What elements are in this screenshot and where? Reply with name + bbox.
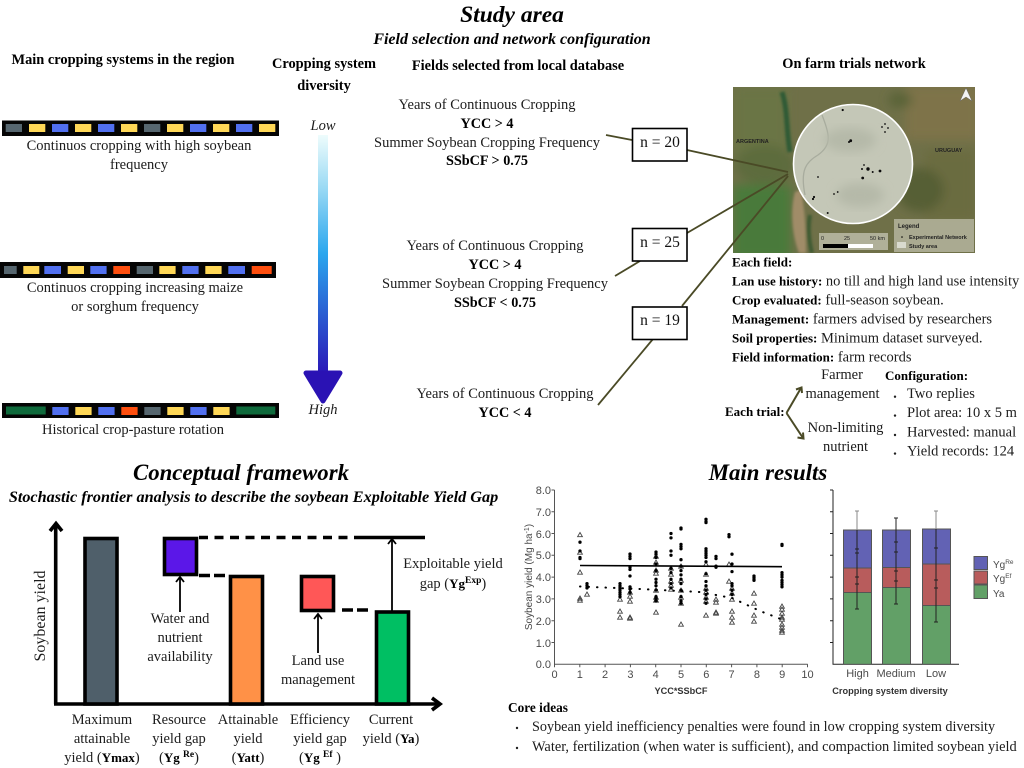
caption: high soybean: frequency bbox=[110, 157, 169, 173]
text: non-limiting nutrient: Non-limiting bbox=[808, 420, 883, 436]
map label: argentina: ARGENTINA bbox=[736, 139, 769, 145]
icon: north arrow bbox=[960, 88, 972, 101]
arrow: water and nutrient bbox=[176, 577, 184, 612]
y tick labels: 5.0 bbox=[536, 550, 551, 562]
x tick labels: 5 bbox=[678, 669, 684, 681]
map scale bar: 0 bbox=[821, 236, 824, 242]
text: each field details: Field information: bbox=[732, 350, 834, 364]
scatter: open triangles bbox=[578, 532, 784, 634]
bar: high bbox=[844, 530, 872, 664]
text: land use management: Land use bbox=[292, 653, 344, 669]
x tick labels: 0 bbox=[551, 669, 558, 681]
text: land use management: management bbox=[281, 672, 355, 688]
label: efficiency yield gap: Ef bbox=[323, 750, 333, 760]
label: efficiency yield gap: Yg bbox=[304, 750, 323, 765]
map legend: Legend bbox=[898, 224, 920, 230]
bar: attainable yield bbox=[230, 576, 262, 704]
text: core ideas: Water, fertilization (when water is sufficient), and compaction limited soybean yield bbox=[532, 739, 1018, 755]
label: maximum attainable yield: attainable bbox=[74, 731, 130, 747]
y axis title: Soybean yield (Mg ha bbox=[524, 533, 535, 630]
heading: fields selected: Fields selected from local database bbox=[412, 58, 625, 74]
y tick labels: 3.0 bbox=[536, 594, 551, 606]
text: core ideas: Soybean yield inefficiency penalties were found in low cropping system diversity bbox=[532, 719, 996, 735]
text: each field details: Management: bbox=[732, 312, 809, 326]
label: efficiency yield gap: yield gap bbox=[293, 731, 347, 747]
y tick labels: 1.0 bbox=[536, 638, 551, 650]
map legend: Study area bbox=[909, 244, 938, 250]
subtitle: stochastic frontier: Stochastic frontier analysis to describe the soybean Exploitable Yield Gap bbox=[9, 488, 498, 506]
label: current yield: Current bbox=[369, 712, 413, 728]
chart: scatter soybean yield vs YCC*SSbCF bbox=[524, 485, 814, 696]
y tick labels: 0.0 bbox=[536, 659, 551, 671]
x tick labels: 8 bbox=[754, 669, 760, 681]
map: experimental network points bbox=[812, 109, 889, 214]
label: maximum attainable yield: Ymax) bbox=[102, 750, 140, 766]
panel: cropping system two bbox=[0, 262, 276, 315]
label: attainable yield: ( bbox=[232, 750, 237, 766]
text: field criteria group one: YCC > 4 bbox=[460, 116, 514, 132]
arrows: trial branches bbox=[786, 388, 804, 438]
y tick labels: 7.0 bbox=[536, 507, 551, 519]
label: each trial: Each trial: bbox=[725, 404, 785, 419]
label: resource yield gap: Resource bbox=[152, 712, 206, 728]
y axis title: ) bbox=[524, 524, 535, 527]
dashed reference lines bbox=[199, 538, 425, 610]
text: exploitable yield gap: Exploitable yield bbox=[403, 556, 503, 572]
category labels: High bbox=[846, 668, 869, 680]
x tick labels bbox=[551, 669, 814, 681]
bar: resource yield gap bbox=[164, 538, 196, 574]
bar: maximum attainable yield bbox=[85, 538, 117, 704]
x tick labels: 9 bbox=[779, 669, 785, 681]
y tick labels bbox=[536, 485, 551, 671]
text: each field details: Crop evaluated: bbox=[732, 292, 822, 308]
title: study area: Study area bbox=[460, 2, 564, 28]
y tick labels: 4.0 bbox=[536, 572, 551, 584]
text: configuration bbox=[885, 368, 1018, 460]
category labels: Medium bbox=[876, 668, 916, 680]
arrow: diversity gradient bbox=[306, 135, 340, 401]
crop strip: increasing maize bbox=[0, 262, 276, 278]
chart: conceptual yield gap diagram bbox=[32, 524, 503, 766]
heading: main results: Main results bbox=[708, 460, 827, 485]
text: each field details: farmers advised by researchers bbox=[809, 312, 992, 328]
box: n = 20 bbox=[632, 128, 687, 161]
map scale bar bbox=[819, 233, 888, 250]
panel: each trial bbox=[725, 367, 1018, 460]
map: on farm trials network bbox=[733, 56, 980, 260]
text: exploitable yield gap: gap ( bbox=[420, 576, 449, 592]
x tick labels: 7 bbox=[729, 669, 735, 681]
connector lines bbox=[598, 135, 788, 405]
crop strip: pasture rotation bbox=[2, 403, 279, 418]
caption: high soybean: Continuos cropping with high soybean bbox=[27, 138, 252, 154]
scatter: filled circles bbox=[580, 519, 782, 603]
label: attainable yield: Yatt) bbox=[236, 750, 264, 766]
heading: cropping system diversity: diversity bbox=[297, 78, 352, 94]
text: field criteria group two: SSbCF < 0.75 bbox=[454, 295, 536, 311]
text: water and nutrient availability: nutrient bbox=[157, 630, 203, 646]
subtitle: field selection: Field selection and network configuration bbox=[372, 31, 651, 48]
label: resource yield gap: yield gap bbox=[152, 731, 206, 747]
x tick labels: 4 bbox=[653, 669, 659, 681]
label: soybean yield axis: Soybean yield bbox=[32, 570, 49, 662]
label: current yield: Ya) bbox=[400, 731, 419, 747]
x tick labels: 1 bbox=[577, 669, 583, 681]
map: study area circle bbox=[794, 104, 912, 224]
text: field criteria group two: Summer Soybean Cropping Frequency bbox=[382, 276, 609, 292]
x axis title: YCC*SSbCF bbox=[654, 686, 708, 696]
caption: pasture rotation: Historical crop-pasture rotation bbox=[42, 422, 225, 438]
label: resource yield gap: ) bbox=[194, 750, 199, 766]
text: core ideas: Core ideas bbox=[508, 700, 568, 715]
text: each field details: Minimum dataset surveyed. bbox=[817, 330, 982, 346]
text: configuration: Harvested: manual bbox=[907, 424, 1016, 440]
heading: on farm trials network: On farm trials network bbox=[782, 56, 926, 72]
category labels: Low bbox=[926, 668, 946, 680]
label: efficiency yield gap: ( bbox=[299, 750, 304, 766]
map scale bar: 50 km bbox=[870, 236, 885, 242]
text: each field details: farm records bbox=[834, 350, 912, 366]
legend: Ya bbox=[993, 589, 1005, 600]
error bars bbox=[855, 511, 938, 622]
chart: stacked bars by cropping system diversity bbox=[830, 490, 1014, 696]
legend bbox=[974, 556, 1014, 600]
text: each field details: full-season soybean. bbox=[822, 292, 944, 308]
text: non-limiting nutrient: nutrient bbox=[823, 439, 868, 455]
label: maximum attainable yield: Maximum bbox=[72, 712, 133, 728]
x tick labels: 2 bbox=[602, 669, 608, 681]
text: field criteria group two: YCC > 4 bbox=[468, 257, 522, 273]
label: current yield: yield ( bbox=[363, 731, 400, 747]
text: water and nutrient availability: availability bbox=[147, 649, 213, 665]
label: resource yield gap: Re bbox=[183, 750, 194, 760]
axes bbox=[50, 524, 440, 710]
label: attainable yield: Attainable bbox=[218, 712, 278, 728]
text: exploitable yield gap: Yg bbox=[449, 576, 466, 591]
arrow: exploitable gap bbox=[388, 539, 396, 611]
text: field criteria group one: Summer Soybean Cropping Frequency bbox=[374, 135, 601, 151]
label: resource yield gap: Yg bbox=[164, 750, 183, 765]
y axis title: -1 bbox=[524, 527, 531, 533]
legend: Yg bbox=[993, 574, 1005, 585]
text: field criteria group three: Years of Continuous Cropping bbox=[417, 386, 593, 402]
label: efficiency yield gap: Efficiency bbox=[290, 712, 351, 728]
box: n = 19: n = 19 bbox=[640, 312, 680, 329]
text: configuration: Two replies bbox=[907, 386, 975, 402]
text: field criteria group one: Years of Continuous Cropping bbox=[399, 97, 575, 113]
text: each field details: no till and high land use intensity bbox=[822, 274, 1020, 290]
label: low: Low bbox=[310, 118, 336, 134]
category labels bbox=[846, 668, 946, 680]
panel: cropping system one bbox=[2, 120, 279, 173]
text: exploitable yield gap: Exp bbox=[465, 576, 481, 586]
text: each field details: Lan use history: bbox=[732, 274, 822, 288]
panel: cropping system three bbox=[2, 403, 279, 438]
map legend bbox=[894, 219, 974, 252]
x tick labels: 3 bbox=[627, 669, 633, 681]
arrow: land use bbox=[314, 614, 322, 653]
text: configuration: Yield records: 124 bbox=[907, 444, 1015, 460]
text: water and nutrient availability: Water and bbox=[151, 611, 210, 627]
axes bbox=[830, 490, 959, 664]
label: maximum attainable yield: yield ( bbox=[64, 750, 102, 766]
text: configuration: Plot area: 10 x 5 m bbox=[907, 405, 1018, 421]
text: farmer management: management bbox=[805, 386, 880, 402]
label: attainable yield: yield bbox=[234, 731, 263, 747]
y tick labels: 6.0 bbox=[536, 529, 551, 541]
y tick labels: 2.0 bbox=[536, 616, 551, 628]
box: n = 19 bbox=[632, 307, 687, 340]
trend line: mean bbox=[580, 586, 782, 620]
map scale bar: 25 bbox=[844, 236, 850, 242]
heading: conceptual framework: Conceptual framework bbox=[133, 460, 350, 485]
text: configuration: Configuration: bbox=[885, 368, 968, 383]
bar: medium bbox=[882, 530, 910, 664]
caption: increasing maize: Continuos cropping increasing maize bbox=[27, 280, 243, 296]
y tick labels: 8.0 bbox=[536, 485, 551, 497]
legend: Re bbox=[1005, 559, 1014, 566]
map label: uruguay: URUGUAY bbox=[935, 148, 963, 154]
trend line: frontier bbox=[580, 566, 782, 567]
box: n = 25: n = 25 bbox=[640, 234, 680, 251]
text: exploitable yield gap: ) bbox=[481, 576, 486, 592]
bar: low bbox=[922, 529, 950, 664]
bar: efficiency yield gap bbox=[302, 576, 334, 610]
bar: current yield bbox=[376, 612, 408, 704]
axes bbox=[552, 490, 808, 667]
text: field criteria group three: YCC < 4 bbox=[478, 405, 532, 421]
heading: cropping system diversity: Cropping system bbox=[272, 56, 376, 72]
x axis title: Cropping system diversity bbox=[832, 686, 949, 696]
crop strip: high soybean bbox=[2, 120, 279, 136]
label: resource yield gap: ( bbox=[159, 750, 164, 766]
box: n = 25 bbox=[632, 228, 687, 261]
text: farmer management: Farmer bbox=[821, 367, 863, 383]
panel: diversity gradient bbox=[272, 56, 376, 418]
heading: main cropping systems: Main cropping systems in the region bbox=[12, 52, 234, 68]
legend: Yg bbox=[993, 560, 1005, 571]
x tick labels: 10 bbox=[801, 669, 814, 681]
x tick labels: 6 bbox=[703, 669, 709, 681]
text: core ideas bbox=[508, 700, 1018, 755]
legend: Ef bbox=[1005, 573, 1012, 580]
label: high: High bbox=[308, 402, 338, 418]
text: each field details: Soil properties: bbox=[732, 330, 817, 346]
label: efficiency yield gap: ) bbox=[333, 750, 341, 766]
caption: increasing maize: or sorghum frequency bbox=[71, 299, 200, 315]
map legend: Experimental Network bbox=[909, 235, 968, 241]
text: each field details: Each field: bbox=[732, 254, 792, 270]
text: field criteria group one: SSbCF > 0.75 bbox=[446, 153, 528, 169]
box: n = 20: n = 20 bbox=[640, 134, 680, 151]
text: field criteria group two: Years of Continuous Cropping bbox=[407, 238, 583, 254]
